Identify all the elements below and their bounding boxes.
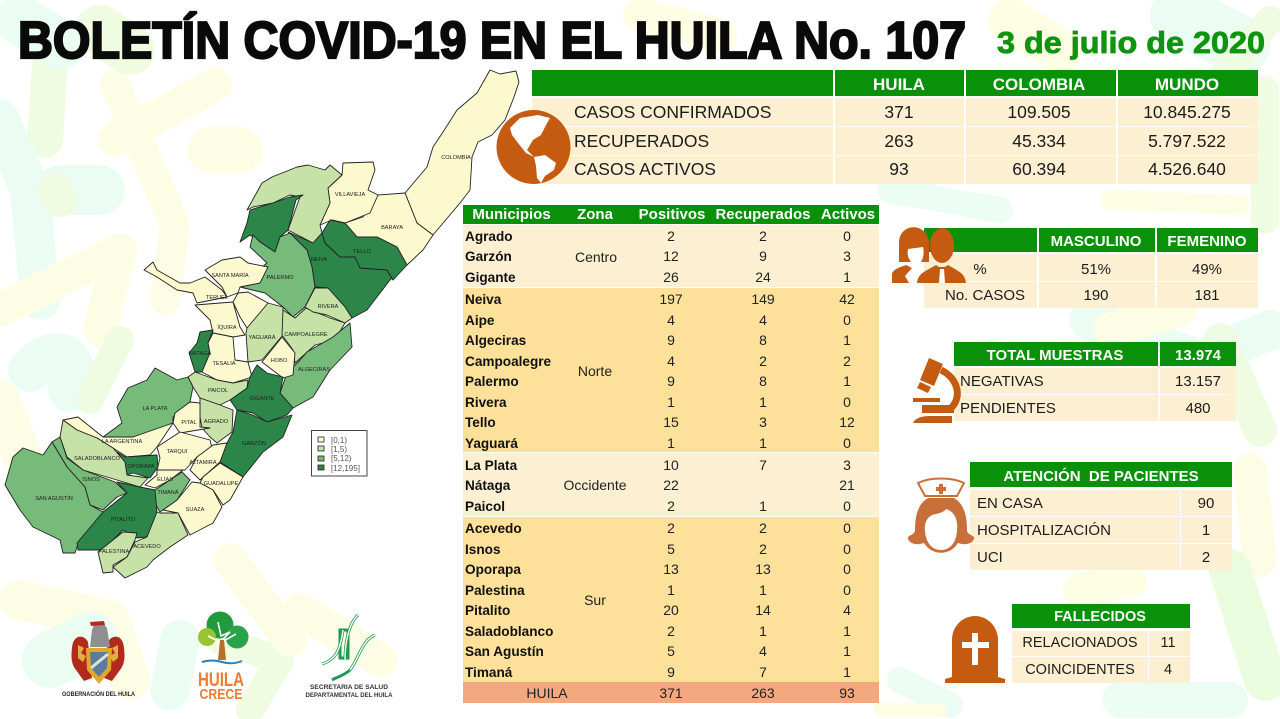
- logo: Huila Crece: CRECE: [200, 686, 242, 703]
- panel: municipalities table: 1: [759, 435, 767, 451]
- municipality labels: NEIVA: [311, 257, 327, 263]
- panel: municipalities table: Neiva: [465, 292, 502, 307]
- panel: municipalities table: 4: [843, 602, 851, 618]
- municipality labels: LA PLATA: [143, 406, 168, 412]
- panel: municipalities table: 4: [667, 353, 675, 369]
- municipality labels: TERUEL: [206, 295, 228, 301]
- panel: municipalities table: Zona: [577, 206, 614, 223]
- panel: municipalities table: 5: [667, 643, 675, 659]
- municipality labels: ÍQUIRA: [217, 324, 237, 331]
- municipality labels: PITAL: [181, 420, 197, 426]
- panel: municipalities table: 26: [663, 269, 679, 285]
- panel: municipalities table: 13: [663, 561, 679, 577]
- panel: comparison table: 10.845.275: [1143, 102, 1231, 122]
- municipality labels: [35, 155, 471, 555]
- panel: municipalities table: 2: [759, 541, 767, 557]
- panel: municipalities table: 3: [759, 414, 767, 430]
- panel: sex table: 51%: [1081, 261, 1111, 278]
- panel: deaths table: RELACIONADOS: [1022, 635, 1138, 651]
- panel: comparison table: CASOS ACTIVOS: [574, 159, 716, 179]
- panel: municipalities table: Garzón: [465, 249, 512, 264]
- panel: municipalities table: 2: [759, 353, 767, 369]
- panel: municipalities table: 0: [843, 541, 851, 557]
- municipality labels: BARAYA: [381, 225, 403, 231]
- panel: comparison table: 109.505: [1007, 102, 1071, 122]
- panel: municipalities table: 4: [759, 643, 767, 659]
- municipality labels: ACEVEDO: [133, 544, 161, 550]
- panel: municipalities table: Rivera: [465, 395, 507, 410]
- map legend: [12,195]: [331, 464, 360, 473]
- municipality labels: TIMANÁ: [157, 489, 179, 496]
- panel: comparison table: CASOS CONFIRMADOS: [574, 102, 771, 122]
- municipality labels: RIVERA: [318, 304, 339, 310]
- logo: Huila Crece: HUILA: [198, 670, 244, 691]
- municipality labels: ELÍAS: [157, 476, 173, 483]
- panel: samples table: TOTAL MUESTRAS: [987, 347, 1123, 364]
- panel: comparison table: [532, 70, 1258, 184]
- panel: municipalities table: 24: [755, 269, 771, 285]
- panel: municipalities table: Acevedo: [465, 521, 522, 536]
- panel: comparison table: 4.526.640: [1148, 159, 1226, 179]
- panel: municipalities table: 9: [667, 664, 675, 680]
- panel: municipalities table: Tello: [465, 415, 496, 430]
- panel: municipalities table: 13: [755, 561, 771, 577]
- panel: comparison table: 5.797.522: [1148, 131, 1226, 151]
- panel: municipalities table: Saladoblanco: [465, 624, 553, 639]
- panel: comparison table: 263: [884, 131, 914, 151]
- panel: municipalities table: Centro: [575, 249, 617, 265]
- panel: deaths table: 11: [1160, 635, 1176, 651]
- panel: municipalities table: 1: [843, 643, 851, 659]
- panel: comparison table: MUNDO: [1155, 75, 1219, 94]
- panel: municipalities table: 10: [663, 457, 679, 473]
- panel: municipalities table: 1: [759, 394, 767, 410]
- map legend: [312, 430, 367, 476]
- panel: municipalities table: 20: [663, 602, 679, 618]
- panel: municipalities table: Palermo: [465, 374, 519, 389]
- municipality labels: SALADOBLANCO: [74, 456, 120, 462]
- panel: samples table: NEGATIVAS: [960, 373, 1044, 390]
- panel: comparison table: 60.394: [1012, 159, 1066, 179]
- panel: municipalities table: 22: [663, 477, 679, 493]
- municipality labels: SANTA MARÍA: [211, 272, 249, 279]
- municipality labels: CAMPOALEGRE: [284, 332, 328, 338]
- municipality labels: OPORAPA: [127, 464, 155, 470]
- panel: municipalities table: 2: [667, 498, 675, 514]
- panel: patient care table: EN CASA: [977, 495, 1043, 512]
- panel: patient care table: ATENCIÓN DE PACIENTES: [1003, 467, 1199, 485]
- panel: municipalities table: 9: [759, 248, 767, 264]
- panel: municipalities table: 12: [663, 248, 679, 264]
- municipalities: [5, 70, 519, 578]
- panel: deaths table: 4: [1164, 662, 1172, 678]
- panel: municipalities table: Agrado: [465, 229, 513, 244]
- panel: municipalities table: 1: [843, 664, 851, 680]
- panel: municipalities table: 4: [759, 312, 767, 328]
- choropleth map of Huila: [5, 70, 519, 578]
- panel: patient care table: UCI: [977, 549, 1003, 566]
- municipality labels: PAICOL: [208, 388, 228, 394]
- panel: sex table: [924, 228, 1258, 308]
- panel: sex table: 181: [1194, 287, 1220, 304]
- panel: municipalities table: 3: [843, 457, 851, 473]
- panel: municipalities table: 1: [843, 269, 851, 285]
- panel: samples table: 13.974: [1175, 347, 1222, 364]
- panel: municipalities table: Isnos: [465, 542, 501, 557]
- municipality labels: COLOMBIA: [441, 155, 471, 161]
- municipality labels: HOBO: [271, 358, 288, 364]
- municipality labels: ALGECIRAS: [298, 367, 330, 373]
- panel: municipalities table: 12: [839, 414, 855, 430]
- panel: municipalities table: 1: [759, 498, 767, 514]
- panel: municipalities table: 7: [759, 457, 767, 473]
- panel: municipalities table: 1: [759, 582, 767, 598]
- panel: municipalities table: 15: [663, 414, 679, 430]
- panel: municipalities table: Positivos: [639, 206, 705, 223]
- icon: people: [892, 227, 966, 283]
- panel: municipalities table: 2: [843, 353, 851, 369]
- panel: comparison table: COLOMBIA: [993, 75, 1085, 94]
- panel: municipalities table: Activos: [821, 206, 875, 223]
- panel: municipalities table: 9: [667, 332, 675, 348]
- municipality labels: GIGANTE: [249, 396, 275, 402]
- municipality labels: AGRADO: [204, 419, 229, 425]
- panel: municipalities table: Sur: [584, 592, 606, 608]
- panel: patient care table: 90: [1198, 495, 1214, 512]
- panel: municipalities table: La Plata: [465, 458, 518, 473]
- panel: municipalities table: 3: [843, 248, 851, 264]
- panel: patient care table: HOSPITALIZACIÓN: [977, 522, 1111, 539]
- logo: Secretaría de Salud: [306, 615, 393, 699]
- panel: patient care table: 1: [1202, 522, 1210, 539]
- municipality labels: SAN AGUSTÍN: [35, 495, 73, 502]
- title: BOLETÍN COVID-19 EN EL HUILA No. 107: [18, 12, 966, 70]
- panel: municipalities table: 21: [839, 477, 855, 493]
- panel: municipalities table: Recuperados: [715, 206, 811, 223]
- panel: municipalities table: Norte: [578, 363, 612, 379]
- panel: municipalities table: 2: [667, 228, 675, 244]
- panel: municipalities table: 14: [755, 602, 771, 618]
- icon: globe: [496, 110, 570, 184]
- panel: municipalities table: Campoalegre: [465, 354, 552, 369]
- panel: samples table: 480: [1185, 400, 1211, 417]
- icon: microscope: [913, 358, 957, 423]
- panel: sex table: FEMENINO: [1167, 233, 1247, 250]
- municipality labels: ISNOS: [82, 477, 100, 483]
- panel: sex table: %: [973, 261, 987, 278]
- panel: municipalities table: 0: [843, 228, 851, 244]
- panel: municipalities table: 8: [759, 332, 767, 348]
- municipality labels: NÁTAGA: [189, 350, 212, 357]
- panel: samples table: 13.157: [1175, 373, 1221, 390]
- panel: municipalities table: Algeciras: [465, 333, 526, 348]
- panel: municipalities table: 0: [843, 520, 851, 536]
- logo: Gobernación del Huila: [62, 621, 136, 698]
- panel: municipalities table: 1: [667, 582, 675, 598]
- panel: municipalities table: 371: [659, 685, 683, 701]
- panel: patient care table: 2: [1202, 549, 1210, 566]
- panel: comparison table: 371: [884, 102, 914, 122]
- panel: municipalities table: 0: [843, 582, 851, 598]
- panel: municipalities table: Municipios: [472, 206, 551, 223]
- panel: municipalities table: Aipe: [465, 313, 495, 328]
- municipality labels: PALESTINA: [99, 549, 129, 555]
- panel: deaths table: COINCIDENTES: [1025, 662, 1135, 678]
- panel: municipalities table: Timaná: [465, 665, 513, 680]
- panel: municipalities table: 149: [751, 291, 775, 307]
- panel: municipalities table: 0: [843, 561, 851, 577]
- municipality labels: VILLAVIEJA: [335, 192, 365, 198]
- panel: municipalities table: 1: [843, 623, 851, 639]
- panel: municipalities table: 7: [759, 664, 767, 680]
- panel: municipalities table: 2: [667, 623, 675, 639]
- panel: municipalities table: 2: [759, 228, 767, 244]
- panel: municipalities table: 0: [843, 498, 851, 514]
- logo: Huila Crece: [198, 612, 248, 703]
- panel: deaths table: [1012, 604, 1190, 683]
- municipality labels: GARZÓN: [242, 440, 266, 447]
- panel: municipalities table: 8: [759, 373, 767, 389]
- panel: municipalities table: Paicol: [465, 499, 505, 514]
- panel: municipalities table: 42: [839, 291, 855, 307]
- panel: deaths table: FALLECIDOS: [1054, 609, 1146, 625]
- logo: Gobernación del Huila: GOBERNACIÓN DEL HUILA: [62, 690, 136, 698]
- panel: sex table: 190: [1083, 287, 1109, 304]
- municipality labels: ALTAMIRA: [189, 460, 217, 466]
- panel: patient care table: [970, 462, 1232, 570]
- panel: municipalities table: 9: [667, 373, 675, 389]
- panel: sex table: No. CASOS: [945, 287, 1025, 304]
- panel: municipalities table: Pitalito: [465, 603, 510, 618]
- panel: comparison table: RECUPERADOS: [574, 131, 709, 151]
- panel: municipalities table: 1: [667, 435, 675, 451]
- municipality labels: YAGUARÁ: [249, 334, 276, 341]
- panel: municipalities table: 1: [667, 394, 675, 410]
- panel: sex table: MASCULINO: [1051, 233, 1142, 250]
- municipality labels: TARQUI: [167, 449, 188, 455]
- logo: Secretaría de Salud: SECRETARIA DE SALUD: [310, 685, 389, 691]
- municipality labels: GUADALUPE: [204, 481, 239, 487]
- municipality labels: SUAZA: [186, 507, 205, 513]
- panel: municipalities table: 93: [839, 685, 855, 701]
- panel: municipalities table: 1: [759, 623, 767, 639]
- map legend: [0,1): [331, 436, 347, 445]
- panel: municipalities table: Oporapa: [465, 562, 521, 577]
- panel: municipalities table: Gigante: [465, 270, 516, 285]
- panel: municipalities table: 197: [659, 291, 683, 307]
- panel: municipalities table: Occidente: [563, 477, 627, 493]
- municipality labels: TELLO: [353, 249, 372, 255]
- date: 3 de julio de 2020: [997, 25, 1265, 60]
- panel: municipalities table: Nátaga: [465, 478, 511, 493]
- panel: sex table: 49%: [1192, 261, 1222, 278]
- panel: municipalities table: Palestina: [465, 583, 525, 598]
- panel: municipalities table: 1: [843, 373, 851, 389]
- panel: samples table: [954, 342, 1236, 421]
- municipality labels: PITALITO: [111, 517, 136, 523]
- panel: municipalities table: [463, 205, 879, 703]
- panel: comparison table: HUILA: [873, 75, 925, 94]
- municipality labels: TESALIA: [212, 361, 236, 367]
- map legend: [1,5): [331, 445, 347, 454]
- panel: municipalities table: 2: [667, 520, 675, 536]
- panel: municipalities table: 0: [843, 312, 851, 328]
- panel: municipalities table: 0: [843, 394, 851, 410]
- municipality labels: LA ARGENTINA: [102, 439, 142, 445]
- panel: municipalities table: 4: [667, 312, 675, 328]
- panel: municipalities table: 2: [759, 520, 767, 536]
- icon: tombstone: [945, 616, 1005, 683]
- panel: municipalities table: 1: [843, 332, 851, 348]
- panel: comparison table: 45.334: [1012, 131, 1066, 151]
- panel: municipalities table: HUILA: [526, 685, 568, 701]
- map legend: [5,12): [331, 454, 352, 463]
- logo: Secretaría de Salud: DEPARTAMENTAL DEL HUILA: [306, 693, 393, 699]
- panel: samples table: PENDIENTES: [960, 400, 1056, 417]
- panel: municipalities table: San Agustín: [465, 644, 544, 659]
- panel: comparison table: 93: [889, 159, 909, 179]
- panel: municipalities table: 0: [843, 435, 851, 451]
- panel: municipalities table: 263: [751, 685, 775, 701]
- icon: nurse: [908, 478, 974, 553]
- panel: municipalities table: Yaguará: [465, 436, 518, 451]
- municipality labels: PALERMO: [267, 275, 294, 281]
- panel: municipalities table: 5: [667, 541, 675, 557]
